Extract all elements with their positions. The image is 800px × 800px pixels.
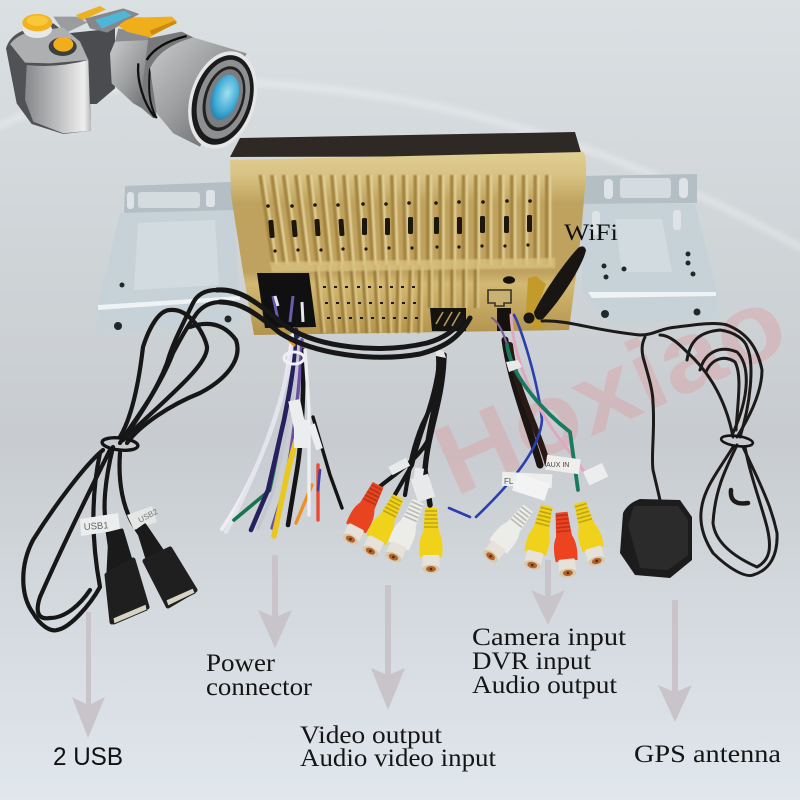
arrow: camera [531, 560, 565, 625]
label: Camera input / DVR input / Audio output: Audio output [472, 672, 617, 699]
label: 2 USB: 2 USB [53, 743, 123, 771]
arrow: power [258, 555, 292, 648]
ethernet port [488, 276, 515, 331]
harness white labels [284, 352, 323, 450]
watermark: Hoxiao [418, 264, 800, 517]
cables: USB [23, 290, 238, 630]
cables: main black harness [217, 290, 470, 357]
label: Power connector: connector [206, 674, 313, 701]
label: WiFi: WiFi [564, 220, 618, 245]
wires: video RCA bundle [378, 348, 446, 505]
RCA plugs: video [338, 480, 443, 573]
wires: camera RCA bundle [449, 315, 608, 517]
label: Camera input / DVR input / Audio output: Camera input [472, 624, 626, 651]
label: GPS antenna: GPS antenna [634, 741, 781, 768]
video bundle labels [388, 458, 435, 502]
head unit fins [260, 175, 555, 333]
USB plug 2 [138, 525, 195, 606]
USB plug 1 [107, 530, 147, 624]
label: Camera input / DVR input / Audio output [472, 624, 626, 699]
wires: power harness [222, 330, 342, 536]
head unit vent slots [266, 199, 532, 319]
label: Video output / Audio video input: Audio video input [300, 745, 496, 772]
USB labels: USB1 [83, 520, 109, 533]
label: Power connector [206, 650, 313, 701]
icon: camera [6, 6, 268, 157]
cables: GPS antenna [542, 321, 777, 576]
arrow: GPS [658, 600, 692, 722]
label: Video output / Audio video input [300, 722, 496, 772]
camera bundle labels [502, 455, 608, 501]
power connector socket [257, 273, 316, 328]
panel: gold head unit [230, 132, 586, 335]
WiFi antenna [524, 246, 586, 330]
head unit dark front bezel [230, 132, 582, 157]
head unit gold housing [230, 152, 586, 335]
GPS puck [620, 499, 692, 578]
arrow: USB [72, 612, 105, 738]
panel: left mounting bracket [96, 182, 240, 335]
camera bundle labels: FL [504, 477, 514, 486]
RCA plugs: camera [479, 499, 609, 579]
arrow: video [371, 585, 405, 710]
label: Video output / Audio video input: Video output [300, 722, 442, 749]
label: Camera input / DVR input / Audio output: DVR input [472, 648, 591, 675]
camera bundle labels: AUX IN [546, 462, 569, 469]
panel: right mounting bracket [580, 174, 720, 323]
video connector socket [430, 308, 466, 331]
USB labels [80, 506, 160, 536]
label: Power connector: Power [206, 650, 276, 677]
USB labels: USB2 [137, 507, 160, 525]
